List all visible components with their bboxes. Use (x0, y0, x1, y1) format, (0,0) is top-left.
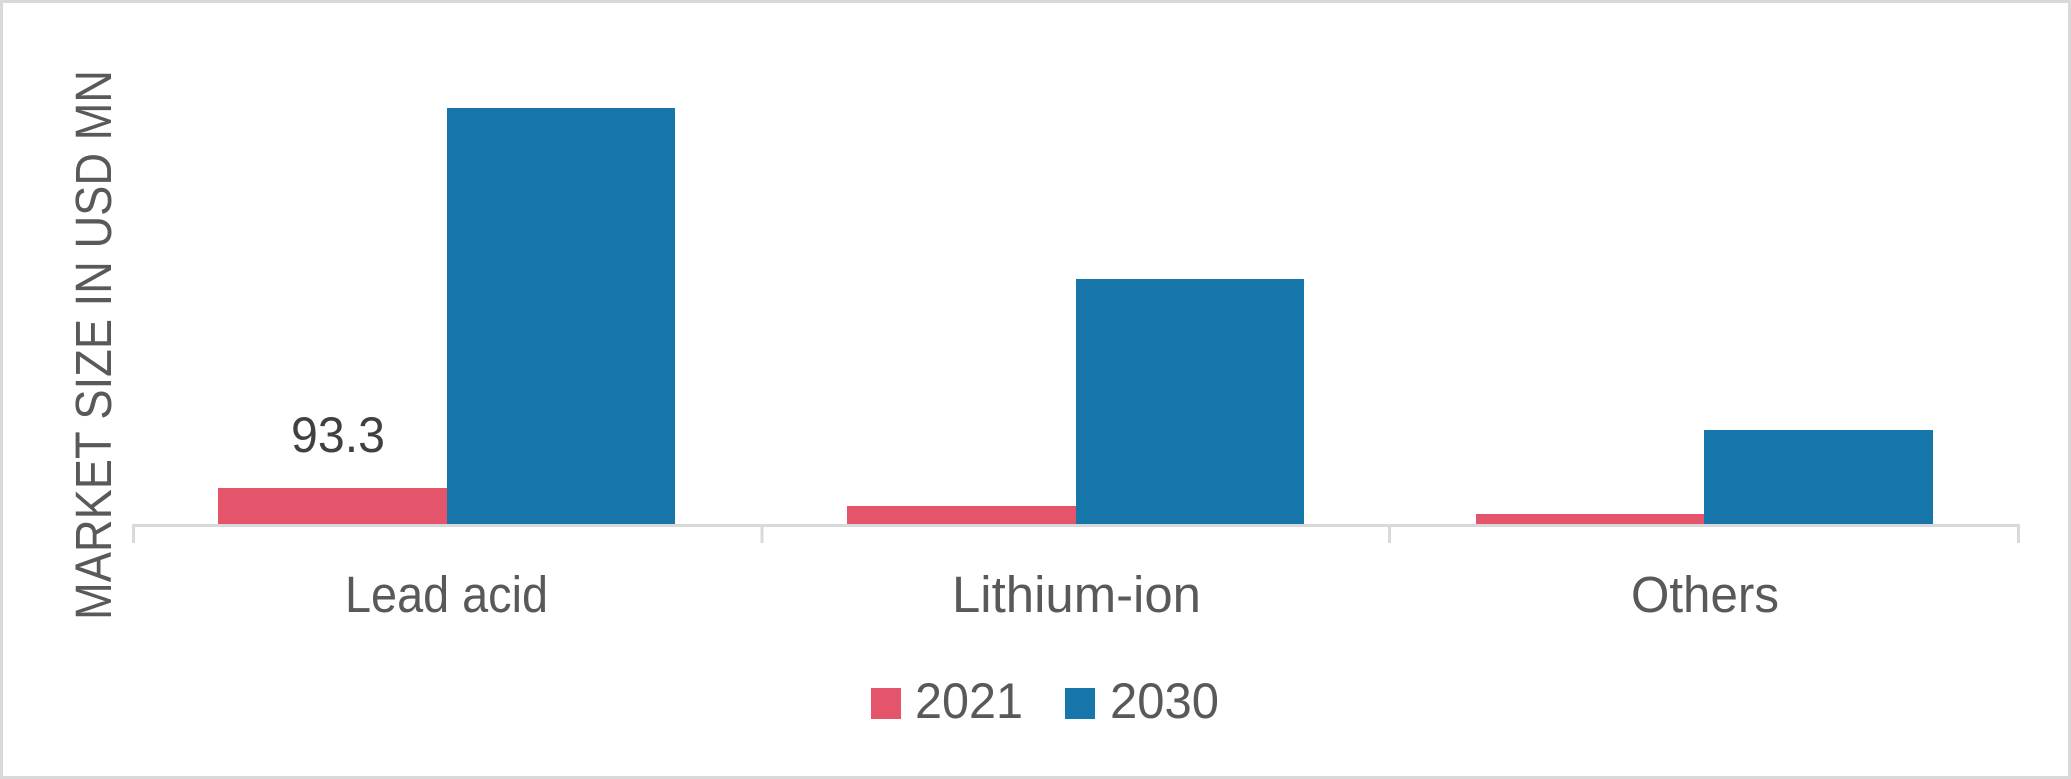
category labels (345, 566, 1779, 623)
legend label: 2030: 2030 (1110, 673, 1219, 729)
bars: Lithium-ion (847, 279, 1304, 524)
bars: Lead acid (218, 108, 675, 524)
bar: Lead acid 2030 (447, 108, 675, 524)
bar: Lithium-ion 2030 (1076, 279, 1304, 524)
legend label: 2021: 2021 (915, 673, 1023, 729)
data label: 93.3: 93.3 (291, 407, 385, 463)
x-axis line with ticks (134, 526, 2018, 543)
legend swatch: 2030 (1065, 688, 1095, 719)
bar: Others 2021 (1476, 514, 1704, 524)
bar: Others 2030 (1704, 430, 1933, 524)
legend swatch: 2021 (871, 688, 901, 719)
category label: Others: Others (1631, 566, 1779, 623)
bars: Others (1476, 430, 1933, 524)
category label: Lithium-ion: Lithium-ion (952, 566, 1201, 623)
bar: Lead acid 2021 (218, 488, 447, 524)
bar: Lithium-ion 2021 (847, 506, 1076, 524)
legend (871, 673, 1219, 729)
category label: Lead acid: Lead acid (345, 566, 548, 623)
y-axis title: MARKET SIZE IN USD MN (65, 70, 122, 620)
